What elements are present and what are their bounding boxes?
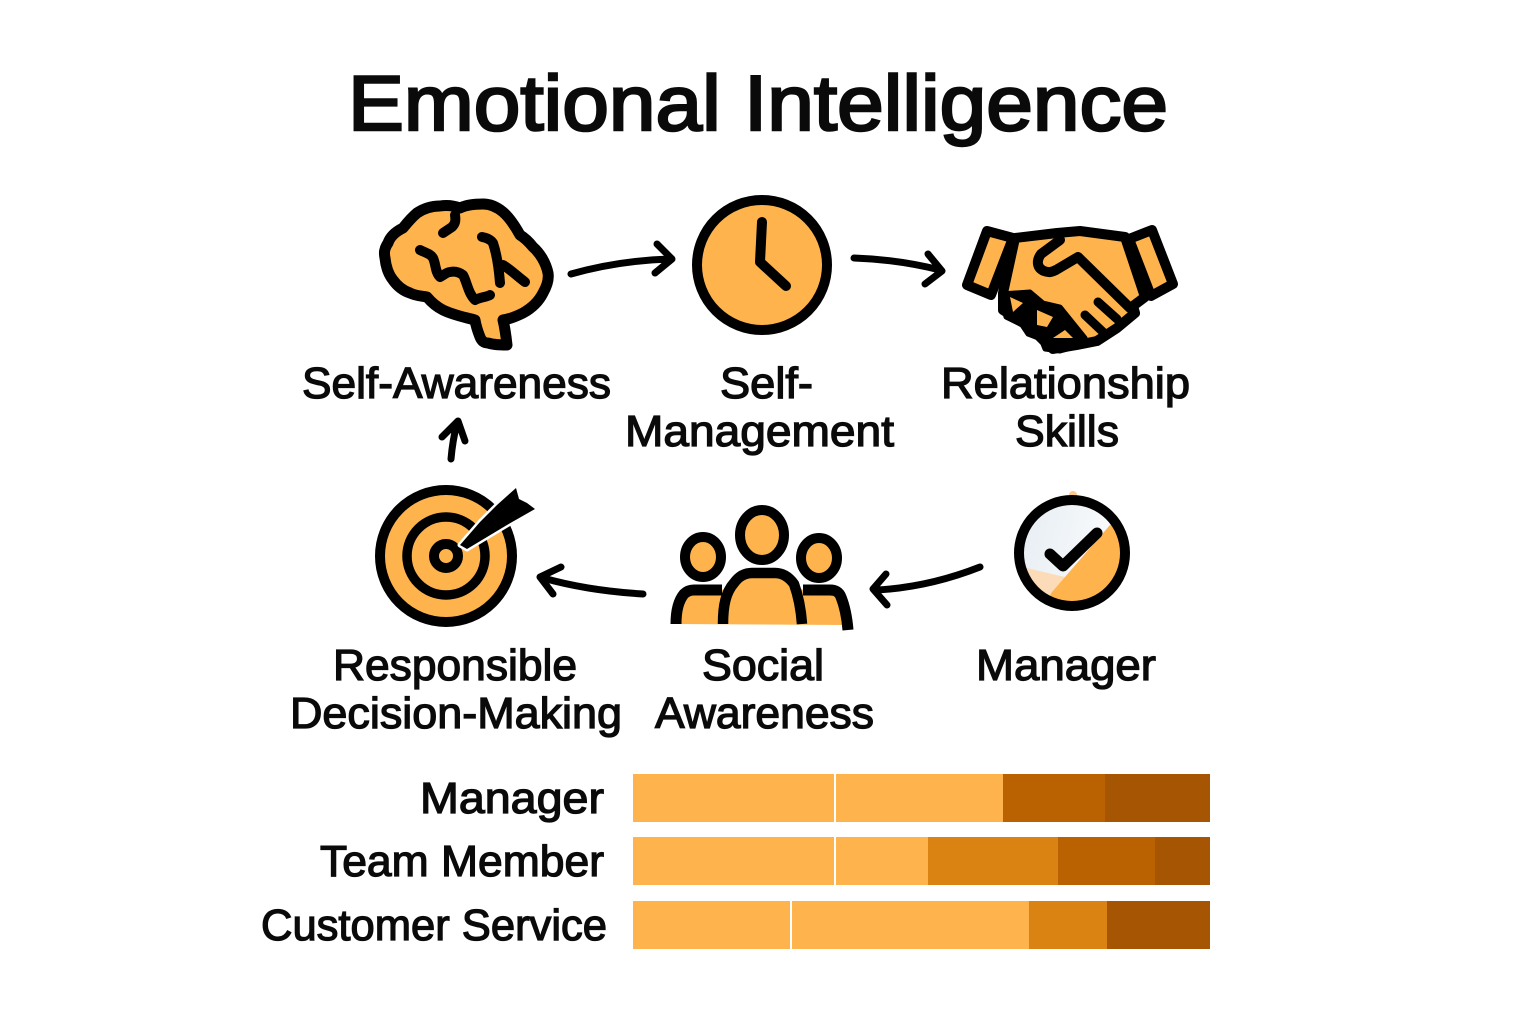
label: self-management: Self- xyxy=(720,359,813,408)
icon: brain xyxy=(384,204,548,345)
icon: handshake xyxy=(967,230,1173,351)
icon: manager check badge xyxy=(1018,491,1130,612)
label: self-management: Management xyxy=(625,407,894,456)
label: relationship skills xyxy=(941,359,1190,456)
label: self-awareness: Self-Awareness xyxy=(302,359,611,408)
arrow: decision-making to self-awareness xyxy=(442,421,465,459)
stacked bar: customer service xyxy=(633,901,1210,949)
icon: clock xyxy=(697,200,827,330)
label: social awareness xyxy=(655,641,874,738)
label: social awareness: Social xyxy=(702,641,824,690)
bar label: team member: Team Member xyxy=(320,837,604,886)
bar label: customer service: Customer Service xyxy=(261,901,607,950)
arrow: self-awareness to self-management xyxy=(571,244,672,274)
label: relationship skills: Relationship xyxy=(941,359,1190,408)
label: manager: Manager xyxy=(976,641,1156,690)
icon: group of people xyxy=(675,510,848,630)
label: social awareness: Awareness xyxy=(655,689,874,738)
label: responsible decision-making xyxy=(290,641,622,738)
label: relationship skills: Skills xyxy=(1015,407,1119,456)
arrow: social awareness to decision-making xyxy=(540,567,643,594)
label: responsible decision-making: Decision-Making xyxy=(290,689,622,738)
stacked bar: manager xyxy=(633,774,1210,822)
bar label: manager: Manager xyxy=(420,774,604,823)
title: Emotional Intelligence xyxy=(348,59,1168,147)
stacked bar: team member xyxy=(633,837,1210,885)
label: self-management xyxy=(625,359,894,456)
arrow: manager to social awareness xyxy=(873,567,980,605)
arrow: self-management to relationship skills xyxy=(854,254,942,284)
icon: target with arrow xyxy=(380,488,535,622)
label: responsible decision-making: Responsible xyxy=(333,641,577,690)
